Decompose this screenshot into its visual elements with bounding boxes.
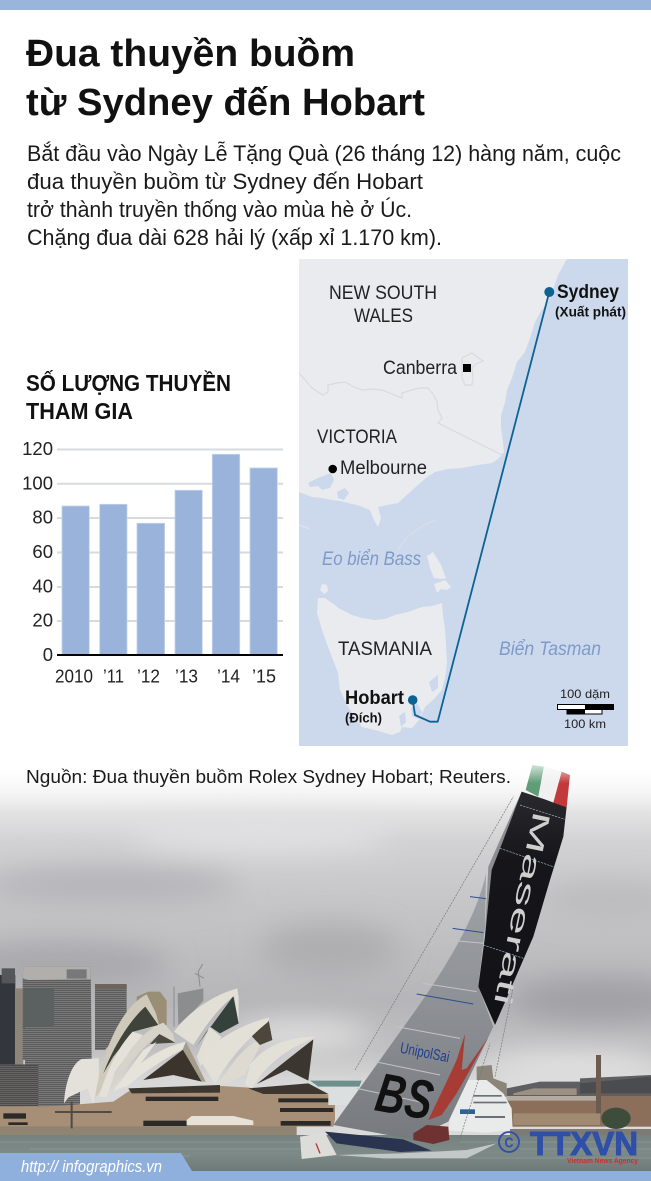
sail seams [357,940,485,1103]
opera right shell interior [257,1039,313,1084]
white fade into page [0,762,651,812]
scale bar [558,687,614,731]
sea labels: Biển Tasman [499,639,601,660]
hobart label: (Đích) [345,710,382,726]
cruise ship [448,1080,513,1133]
melbourne marker [328,465,337,473]
x axis labels: ’11 [103,666,124,686]
distant bridge [507,1075,651,1097]
race route line [413,292,549,722]
hobart label: Hobart [345,688,405,709]
intro text: Bắt đầu vào Ngày Lễ Tặng Quà (26 tháng 12) hàng năm, cuộc [27,141,621,166]
scale bar: 100 km [564,717,606,731]
bass strait islands [320,552,451,594]
hobart estuary details [399,675,438,727]
y axis labels: 120 [22,438,53,459]
title [26,33,425,124]
y axis labels: 80 [32,506,53,528]
mainsail grey [333,873,493,1139]
copyright mark [499,1132,519,1152]
sydney label: (Xuất phát) [555,304,626,320]
intro text: Chặng đua dài 628 hải lý (xấp xỉ 1.170 km). [27,225,442,250]
opera middle shell interior [251,1020,272,1045]
hull [325,1132,432,1152]
x axis labels: ’14 [217,666,240,686]
opera front shell body [115,1042,186,1088]
state borders [299,353,502,550]
unipolsai logo: UnipolSai [399,1040,451,1066]
opera restaurant roof [187,1116,253,1125]
x axis labels [55,666,276,686]
y axis labels: 0 [43,644,53,665]
sydney marker [544,287,554,297]
mainland [299,259,567,527]
chimney [596,1055,601,1113]
copyright logo TTXVN: C [504,1134,514,1152]
red trident [428,1034,488,1120]
map place labels: Canberra [383,358,457,379]
sea labels [322,549,601,660]
hobart label [345,688,405,726]
sydney label [555,282,626,320]
chart axis baseline [57,654,283,656]
x axis labels: ’13 [175,666,198,686]
opera upper shell interior [195,996,239,1048]
top colour band [0,0,651,10]
opera second shell [110,1023,175,1088]
opera tall shell inner body [99,1032,143,1097]
leech strip [485,792,522,937]
x axis labels: ’12 [137,666,160,686]
title: Đua thuyền buồm [26,33,355,75]
map place labels: TASMANIA [338,639,432,660]
map place labels [317,283,457,660]
hobart marker [408,695,418,705]
intro text [27,141,621,250]
opera podium [0,1086,335,1127]
bow [300,1133,337,1159]
chart gridlines [57,450,283,621]
chart heading: THAM GIA [26,398,133,424]
black sail seams [483,805,565,958]
title: từ Sydney đến Hobart [26,82,425,124]
city skyline [0,964,204,1107]
black sail [478,792,567,1025]
opera windows [3,1097,333,1126]
left ship and buildings [310,1080,360,1105]
distant harbour [310,1055,651,1133]
port phillip bay [308,473,349,500]
skyline foreground block [25,1027,80,1107]
distant hill buildings [477,1065,507,1097]
opera small left shell [64,1058,99,1104]
y axis labels: 100 [22,472,53,494]
opera base wall [0,1126,297,1136]
water ripples [0,1142,651,1158]
skyline round tower [23,967,92,1060]
map place labels: WALES [354,306,413,327]
footer url: http:// infographics.vn [21,1158,162,1176]
map panel [299,259,628,746]
chart heading: SỐ LƯỢNG THUYỀN [26,369,231,396]
skyline left towers [0,975,15,1065]
map place labels: NEW SOUTH [329,283,437,304]
racing yacht [300,762,572,1159]
intro text: trở thành truyền thống vào mùa hè ở Úc. [27,197,412,222]
tasmania [317,598,447,735]
clouds [0,819,651,1077]
opera house [0,988,335,1136]
wake [337,1143,497,1158]
skyline tan towers [137,992,167,1025]
tree [601,1108,631,1129]
opera tall shell interior [103,1007,158,1073]
chart bars [62,454,277,655]
sydney label: Sydney [557,282,619,303]
opera right shell [245,1037,314,1088]
footer band with url [0,1153,651,1181]
skyline dark tower [95,985,127,1050]
opera lamp post [71,1102,73,1128]
BS lettering: BS [371,1061,438,1132]
sea background [299,259,628,746]
logo wordmark: TTXVN [530,1125,638,1162]
opera tall shell rim [95,994,159,1098]
brick wharf buildings [507,1096,651,1127]
chart: number of boats [22,369,283,686]
chart heading [26,369,231,424]
source note: Nguồn: Đua thuyền buồm Rolex Sydney Hobart; Reuters. [26,766,511,787]
scale bar: 100 dặm [560,687,610,701]
sea labels: Eo biển Bass [322,549,421,570]
harbour water [0,1135,651,1172]
x axis labels: 2010 [55,666,93,686]
italian flag tip [526,765,544,797]
skyline crane [174,964,204,1027]
rigging [355,797,513,1138]
logo tagline: Vietnam News Agency [567,1158,638,1165]
crew [413,1125,449,1144]
map place labels: Melbourne [340,458,427,479]
opera front shell interior [143,1049,202,1082]
photo: sydney harbour with yacht [0,762,651,1172]
y axis labels: 20 [32,610,53,630]
y axis labels: 60 [32,541,53,562]
map place labels: VICTORIA [317,427,397,448]
maserati lettering: Maserati [488,809,555,1007]
y axis labels [22,438,53,665]
canberra marker [463,364,471,372]
sky [0,762,651,1162]
intro text: đua thuyền buồm từ Sydney đến Hobart [27,169,423,194]
y axis labels: 40 [32,576,53,596]
opera dark shell bases [128,1083,328,1094]
x axis labels: ’15 [252,666,276,686]
opera front shell right rim [183,1042,206,1082]
copyright logo TTXVN [499,1125,638,1165]
opera upper shell [174,988,239,1045]
opera middle shell [200,1017,269,1084]
